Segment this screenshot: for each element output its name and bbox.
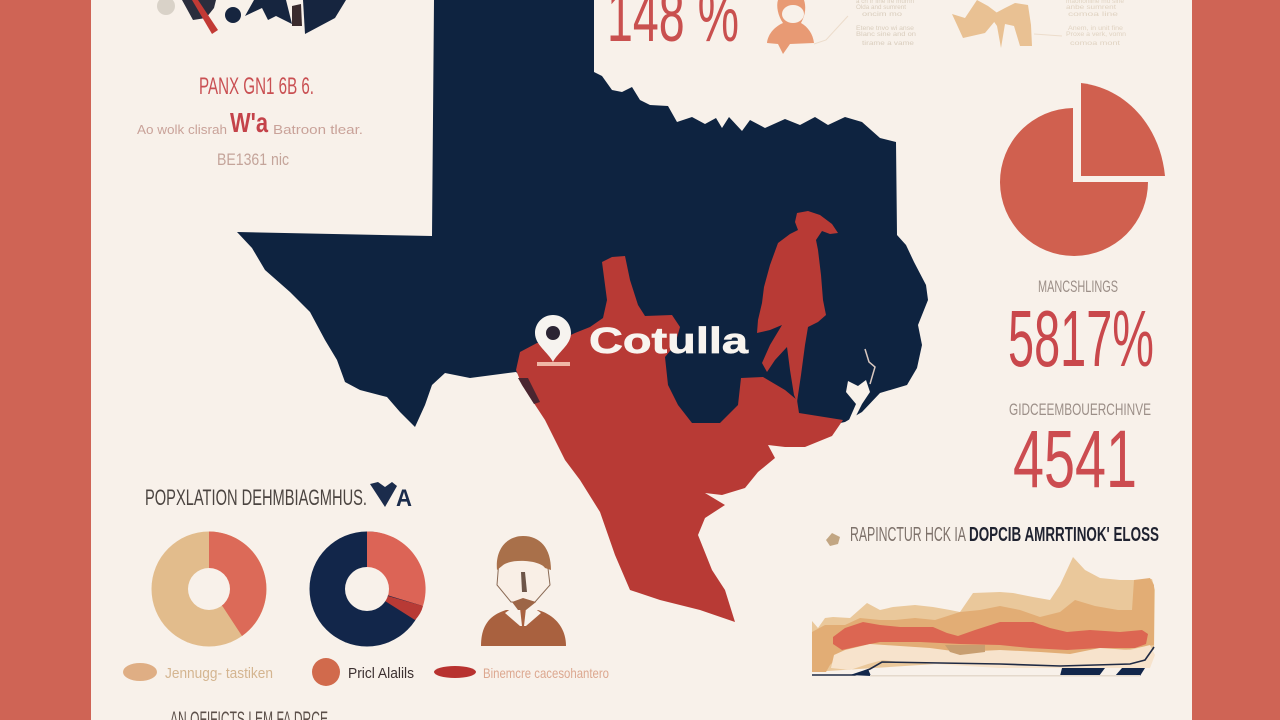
area: cream lower band [831, 644, 1155, 670]
map: red South Texas region [516, 256, 843, 622]
icon: peach person [767, 0, 848, 54]
title dark part: DOPCIB AMRRTINOK' ELOSS [969, 524, 1159, 546]
legend item: red [434, 665, 609, 681]
top caption right [1066, 0, 1126, 47]
pie chart: top right [1000, 83, 1165, 256]
main pie sector [1000, 108, 1148, 256]
caption left: Ao wolk clisrah [137, 122, 227, 137]
top left emblem [157, 0, 346, 34]
donut chart: navy and red [310, 531, 426, 646]
area: tan top layer [812, 557, 1155, 672]
block highlight: W'a [230, 107, 268, 138]
map: dark shading at region edge [518, 378, 540, 404]
label: GIDCEEMBOUERCHINVE [1009, 400, 1151, 419]
icon: person portrait [481, 536, 566, 646]
area: orange mid layer [812, 578, 1154, 672]
top caption left: Etene tnvo wi anse [856, 26, 915, 32]
heading: population demographics [145, 482, 412, 512]
caption right: Batroon tlear. [273, 122, 363, 137]
legend item: tan [123, 663, 273, 682]
legend item: tan: Jennugg- tastiken [165, 665, 273, 682]
block heading: PANX GN1 6B 6. [199, 73, 314, 100]
area: red band [833, 622, 1148, 650]
top caption left: tirame a vame [862, 41, 915, 47]
top caption right: comoa mont [1070, 41, 1121, 47]
city name: Cotulla [589, 320, 749, 361]
icon: tan figure [952, 0, 1062, 48]
value: 5817% [1008, 294, 1154, 383]
map: river line near coast [865, 349, 875, 384]
title light part: RAPINCTUR HCK IA [850, 524, 966, 546]
value: 4541 [1013, 414, 1137, 505]
top caption left: oncim mo [862, 12, 903, 18]
top caption right: Proxe a verk, vomn [1066, 32, 1126, 38]
legend item: orange [312, 658, 414, 686]
stat: 5817% [1008, 277, 1154, 383]
top caption left: Blanc sine and on [856, 32, 916, 38]
map: Texas navy silhouette [237, 0, 928, 440]
navy letter: A [396, 485, 412, 512]
chart base line [812, 647, 1154, 675]
map: Cotulla location label [535, 315, 749, 366]
top caption right: anbe sumrent [1066, 5, 1116, 11]
legend [123, 658, 609, 686]
icon: navy heart [370, 482, 397, 507]
map: red walking figure silhouette [757, 211, 838, 402]
icon: small tan mark [826, 533, 840, 546]
top left text block [137, 73, 363, 169]
legend item: red: Binemcre cacesohantero [483, 665, 609, 681]
top caption left [856, 0, 916, 47]
chart navy base blocks [850, 668, 1145, 676]
area chart [812, 557, 1155, 676]
icon: location pin [535, 315, 571, 366]
label: MANCSHLINGS [1038, 277, 1118, 296]
chart base rule [870, 675, 1140, 676]
heading: chart title [826, 524, 1159, 546]
stat: 4541 [1009, 400, 1151, 505]
area: tan patch [945, 645, 985, 655]
top caption right: comoa line [1068, 12, 1119, 18]
top caption left: Olda and sumrent [856, 5, 906, 11]
caption number: BE1361 nic [217, 150, 289, 169]
heading: population demographics: POPXLATION DEHMBIAGMHUS. [145, 485, 367, 510]
legend item: orange: Pricl Alalils [348, 665, 414, 682]
pulled-out slice [1081, 83, 1165, 176]
donut chart: tan and red [152, 532, 266, 646]
top caption right: Anem, in unit fine [1068, 26, 1124, 32]
map: coastal bay cutout [846, 380, 870, 420]
